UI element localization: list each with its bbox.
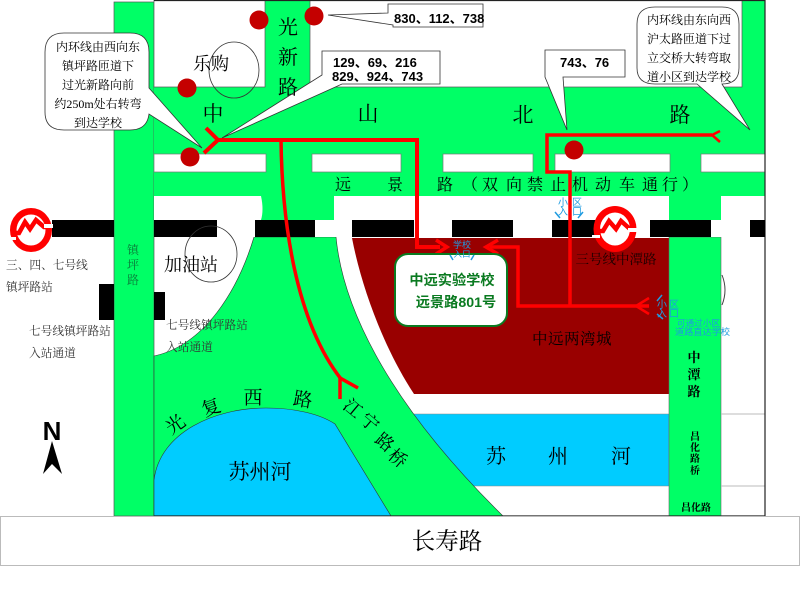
river label: west section: 苏州河 bbox=[228, 460, 292, 484]
callout: east inner ring directions: 立交桥大转弯取 bbox=[647, 50, 731, 65]
road label: Changhua Road Bridge: 桥 bbox=[690, 464, 700, 477]
road label: Yuanjing Road: 远景路（双向禁止机动车通行） bbox=[335, 176, 698, 194]
bottom road: Changshou Road: 长寿路 bbox=[412, 528, 482, 555]
road network: green roads bbox=[114, 0, 765, 516]
station label: lines 3 4 7 Zhenping Road: 三、四、七号线 bbox=[6, 258, 88, 272]
callout: west inner ring directions: 镇坪路匝道下 bbox=[62, 58, 134, 73]
road label: Zhenping Road: 镇 bbox=[127, 242, 140, 257]
callout: west inner ring directions: 到达学校 bbox=[74, 115, 123, 130]
school entrance marker bbox=[450, 239, 474, 260]
callout: bus lines 743 76 bbox=[545, 50, 625, 130]
callout: west inner ring directions bbox=[45, 33, 202, 148]
landmark label: Legou: 乐购 bbox=[193, 54, 229, 74]
road label: Zhongshan North Road: 山 bbox=[358, 102, 378, 126]
icon: north arrow: N bbox=[43, 416, 61, 446]
landmark circles bbox=[185, 42, 259, 282]
north estate entrance marker bbox=[555, 197, 583, 218]
metro logo: west station bbox=[9, 208, 53, 252]
station label: line 7 entrance west: 七号线镇坪路站 bbox=[29, 324, 111, 338]
road label: Zhongtan Road: 路 bbox=[687, 384, 701, 399]
road label: Guangxin Road: 路 bbox=[278, 76, 298, 99]
school label box bbox=[395, 254, 507, 326]
callout: east inner ring directions bbox=[637, 7, 750, 130]
road label: Zhongshan North Road: 中 bbox=[202, 102, 224, 126]
station label: line 3 Zhongtan Road: 三号线中潭路 bbox=[576, 251, 657, 267]
callout: bus lines 830 112 738 bbox=[328, 4, 484, 27]
road label: Guangfu West Road bbox=[161, 387, 314, 439]
callout: bus lines 743 76: 743、76 bbox=[560, 55, 609, 70]
school entrance marker: 学校 bbox=[453, 239, 471, 250]
callout: bus lines 129 69 216 829 924 743: 129、69、216 bbox=[333, 55, 417, 70]
road label: Guangfu West Road: 西 bbox=[243, 387, 263, 409]
road label: Jiangning Road Bridge: 路 bbox=[371, 429, 398, 456]
road label: Guangxin Road: 新 bbox=[278, 46, 298, 69]
river label: east section: 河 bbox=[611, 445, 631, 468]
road label: Guangfu West Road: 复 bbox=[199, 394, 224, 422]
road label: Guangfu West Road: 路 bbox=[292, 388, 314, 412]
road label: Jiangning Road Bridge: 桥 bbox=[384, 445, 411, 472]
school label box: 中远实验学校 bbox=[409, 272, 495, 289]
callout: west inner ring directions: 约250m处右转弯 bbox=[54, 96, 142, 111]
road label: Changhua Road Bridge: 昌 bbox=[690, 430, 700, 443]
callout: east inner ring directions: 道小区到达学校 bbox=[647, 69, 732, 84]
road label: Zhenping Road: 坪 bbox=[127, 258, 139, 272]
residential block: Zhongyuan Liangwan City bbox=[352, 238, 669, 394]
station label: line 7 entrance west: 入站通道 bbox=[29, 346, 76, 360]
east estate entrance marker: 可通过小区 bbox=[677, 317, 720, 328]
river: east section of Suzhou Creek bbox=[375, 414, 669, 486]
river label: east section: 州 bbox=[548, 446, 568, 468]
school label box: 远景路801号 bbox=[416, 295, 496, 311]
road label: Zhenping Road: 路 bbox=[127, 273, 139, 287]
callout: bus lines 129 69 216 829 924 743 bbox=[222, 51, 440, 138]
east estate entrance marker: 区 bbox=[669, 299, 679, 311]
station label: line 7 entrance east: 七号线镇坪路站 bbox=[166, 318, 248, 332]
station label: lines 3 4 7 Zhenping Road: 镇坪路站 bbox=[6, 280, 53, 294]
callout: west inner ring directions: 过光新路向前 bbox=[62, 77, 134, 92]
road label: Jiangning Road Bridge bbox=[339, 395, 411, 472]
east estate entrance marker bbox=[657, 295, 730, 337]
callout: bus lines 830 112 738: 830、112、738 bbox=[394, 11, 484, 26]
callout: bus lines 129 69 216 829 924 743: 829、924、743 bbox=[332, 69, 423, 84]
north estate entrance marker: 区 bbox=[572, 197, 582, 209]
east estate entrance marker: 道路直达学校 bbox=[675, 326, 730, 337]
road label: Zhongtan Road: 中 bbox=[687, 350, 701, 365]
road label: Changhua Road Bridge: 化 bbox=[690, 441, 700, 454]
metro logo: Zhongtan Road station bbox=[592, 206, 638, 252]
east estate entrance marker: 口 bbox=[669, 309, 679, 320]
landmark label: Zhongyuan Liangwan City: 中远两湾城 bbox=[532, 330, 612, 348]
east estate entrance marker: 入 bbox=[657, 309, 667, 320]
route: east approach through the estate bbox=[486, 131, 720, 314]
road label: Guangfu West Road: 光 bbox=[161, 410, 190, 439]
east estate entrance marker: 小 bbox=[657, 299, 667, 311]
station entrance blocks bbox=[99, 284, 165, 320]
north estate entrance marker: 小 bbox=[558, 197, 568, 209]
road label: Changhua Road: 昌化路 bbox=[681, 501, 711, 514]
map border lines bbox=[154, 0, 765, 516]
school entrance marker: 入口 bbox=[453, 249, 471, 259]
road label: Zhongshan North Road: 路 bbox=[670, 103, 690, 127]
metro line bar bbox=[52, 220, 765, 237]
road label: Guangxin Road: 光 bbox=[278, 16, 298, 39]
bus stops: red dots bbox=[178, 6, 584, 166]
road label: Jiangning Road Bridge: 宁 bbox=[356, 409, 383, 436]
road label: Zhongtan Road: 潭 bbox=[687, 367, 701, 382]
route: west approach with Jiangning bridge branch bbox=[204, 128, 447, 399]
landmark label: gas station: 加油站 bbox=[164, 255, 218, 275]
east side plots bbox=[721, 275, 765, 486]
station label: line 7 entrance east: 入站通道 bbox=[166, 340, 213, 354]
callout: east inner ring directions: 内环线由东向西 bbox=[647, 12, 731, 27]
north estate entrance marker: 入 bbox=[558, 207, 568, 218]
river: west section of Suzhou Creek bbox=[154, 408, 391, 516]
lower green area bbox=[154, 237, 503, 516]
north estate entrance marker: 口 bbox=[572, 207, 582, 218]
bottom road: Changshou Road bbox=[0, 516, 800, 566]
icon: north arrow bbox=[43, 416, 62, 474]
river label: east section: 苏 bbox=[486, 444, 507, 468]
callout: west inner ring directions: 内环线由西向东 bbox=[56, 39, 140, 54]
road label: Zhongshan North Road: 北 bbox=[512, 103, 534, 127]
callout: east inner ring directions: 沪太路匝道下过 bbox=[647, 31, 731, 46]
road label: Jiangning Road Bridge: 江 bbox=[339, 395, 366, 422]
Zhongtan road bbox=[669, 237, 721, 516]
road label: Changhua Road Bridge: 路 bbox=[690, 452, 700, 465]
